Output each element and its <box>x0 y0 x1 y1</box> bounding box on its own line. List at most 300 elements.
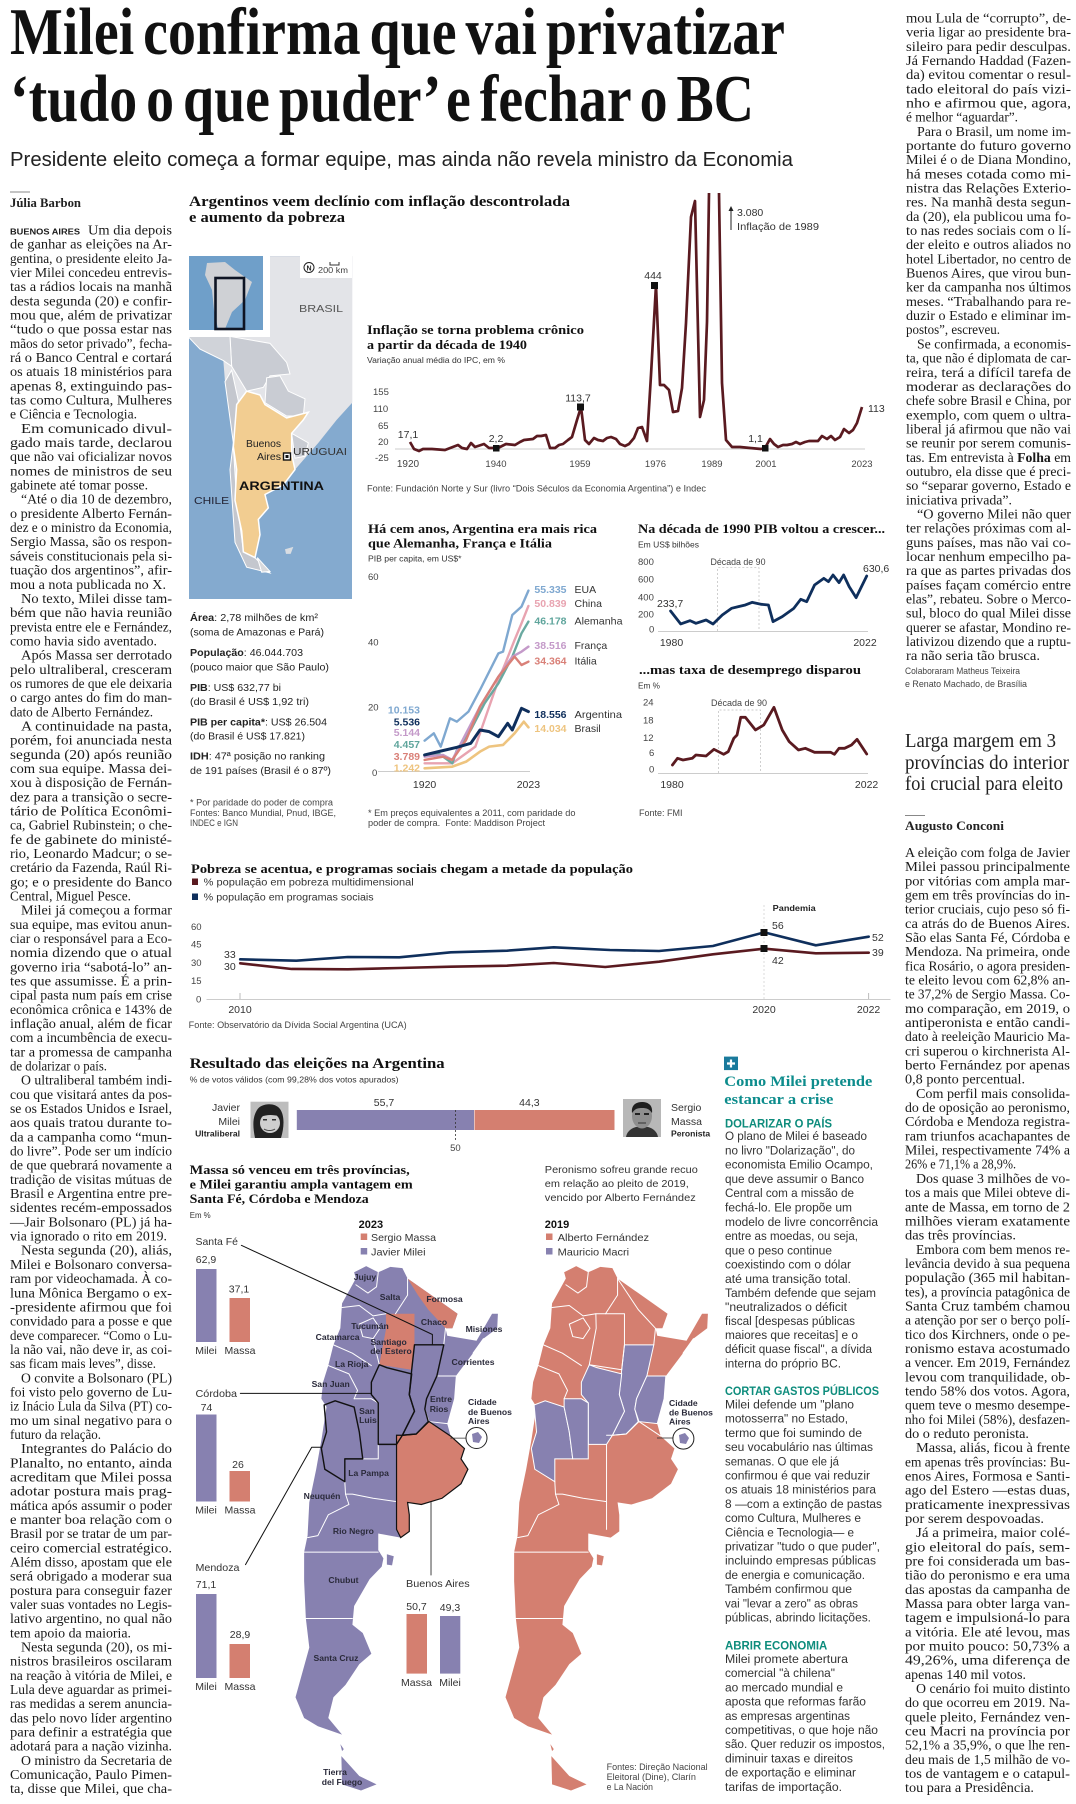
text block: main article column 1: tuação dos argentinos”, afir- <box>10 564 172 579</box>
chart: GDP per capita comparison: 1.242 <box>394 762 420 774</box>
chart: GDP per capita comparison: 18.556 <box>534 709 567 721</box>
candidate: Javier Milei: Milei <box>218 1116 240 1128</box>
panel: Como Milei pretende estancar a crise: motosserra" no Estado, <box>725 1412 848 1426</box>
text block: main article column 1: para definir a estratégia que <box>10 1726 172 1740</box>
text block: main article column 1: Nesta segunda (20), aliás, <box>21 1244 172 1259</box>
panel: Como Milei pretende estancar a crise: semanas. O que ele já <box>725 1454 839 1468</box>
text block: main article column 1: “tudo o que possa estar nas <box>10 323 172 338</box>
text block: main article continuation, right column: nistra das Relações Exterio- <box>906 182 1071 196</box>
text block: secondary article: Dos quase 3 milhões de vo- <box>916 1172 1070 1187</box>
chart: inflation line chart: 2,2 <box>489 433 503 445</box>
chart: unemployment 1980-2022: Década de 90 <box>711 698 767 709</box>
footnote: map sources: Fontes: Banco Mundial, Pnud, IBGE, <box>190 808 336 818</box>
text block: main article column 1: dato de Alberto Fernández. <box>10 705 153 720</box>
panel: Como Milei pretende estancar a crise: seu vocabulário nas últimas <box>725 1440 873 1454</box>
legend: 2019: 2019 <box>545 1219 569 1231</box>
chart: GDP per capita comparison <box>368 521 623 828</box>
text block: main article column 1: mo um sinal negativo para o <box>10 1414 172 1429</box>
text block: main article column 1: dez e o ministro da Economia, <box>10 521 172 536</box>
text block: secondary article: tos de vantagem e o catapul- <box>905 1767 1070 1782</box>
panel: Como Milei pretende estancar a crise: comercial "à chilena" <box>725 1666 835 1680</box>
credits <box>905 666 1028 690</box>
text block: main article continuation, right column: lativizou dizendo que a ruptu- <box>906 635 1071 650</box>
text block: main article continuation, right column: exemplo, com quem o ultra- <box>906 408 1071 423</box>
chart: poverty and social programs <box>189 861 890 1030</box>
text block: main article column 1: go; e o presidente do Banco <box>10 875 172 890</box>
text block: main article continuation, right column: locar nenhum empecilho pa- <box>906 550 1071 565</box>
text block: main article column 1: futuro da relação. <box>10 1428 101 1443</box>
text block: secondary article: enos Aires, Formosa e Santi- <box>905 1470 1070 1484</box>
panel: Como Milei pretende estancar a crise: ABRIR ECONOMIA <box>725 1638 828 1652</box>
chart: Mendoza bars <box>195 1562 256 1693</box>
heading: provinces <box>190 1162 413 1220</box>
chart: Buenos Aires bars: Massa <box>401 1677 432 1689</box>
text block: secondary article: ceu Macri na província por <box>905 1724 1070 1740</box>
text block: Argentina facts: (do Brasil é US$ 1,92 tri) <box>190 696 309 708</box>
text block: secondary article: tou para a Presidência. <box>905 1781 1034 1796</box>
footnote: election sources: Fontes: Direção Nacional <box>607 1762 708 1772</box>
province labels 2023: Salta <box>380 1292 400 1302</box>
text block: main article column 1: Após Massa ser derrotado <box>21 649 172 664</box>
text block: main article continuation, right column: é melhor “aguardar”. <box>906 111 1018 126</box>
panel: Como Milei pretende estancar a crise: no livro "Dolarização", do <box>725 1143 855 1157</box>
panel: Como Milei pretende estancar a crise: maiores que receitas] e o <box>725 1328 858 1342</box>
text block: main article column 1: na reação à vitória de Milei, e <box>10 1669 172 1684</box>
panel: Como Milei pretende estancar a crise: O plano de Milei é baseado <box>725 1129 867 1143</box>
panel: Como Milei pretende estancar a crise: de exportação e eliminar <box>725 1766 856 1780</box>
text block: main article continuation, right column: ker da campanha nos últimos <box>906 281 1071 296</box>
footnote: map sources <box>190 798 336 828</box>
heading: Argentinos veem declínio: Argentinos veem declínio com inflação descontrolada <box>189 194 571 210</box>
text block: main article column 1: fe de gabinete do ministé- <box>10 833 172 848</box>
province labels 2023: Misiones <box>466 1324 503 1334</box>
chart: GDP 1980-2022 <box>638 521 889 649</box>
text block: secondary article: por muito pouco: 50,73% a <box>905 1640 1071 1654</box>
chart: GDP per capita comparison: 40 <box>368 638 379 648</box>
text block: secondary article: pre foi considerada um bas- <box>905 1554 1070 1570</box>
panel: Como Milei pretende estancar a crise: como Cultura, Mulheres e <box>725 1511 861 1525</box>
credits: e Renato Machado, de Brasília <box>905 679 1028 690</box>
chart: Mendoza bars: Mendoza <box>196 1562 240 1574</box>
map: 2019 election by province: de Buenos <box>669 1408 713 1418</box>
province labels 2023: Santiago <box>370 1337 407 1347</box>
text block: main article column 1: cipal pasta num país em crise <box>10 989 172 1004</box>
province labels 2023: Rio Negro <box>333 1526 374 1536</box>
text block: main article column 1: iz Inácio Lula da Silva (PT) co- <box>10 1400 172 1415</box>
text block: secondary article: São elas Santa Fé, Córdoba e <box>905 931 1070 946</box>
text block: secondary article: Com perfil mais consolida- <box>916 1087 1070 1102</box>
chart: Córdoba bars: 26 <box>232 1459 244 1471</box>
text block: Argentina facts: População: 46.044.703 <box>190 647 303 659</box>
text block: main article column 1: nistros brasileiros oscilaram <box>10 1655 172 1670</box>
panel: Como Milei pretende estancar a crise: Milei defende um "plano <box>725 1398 854 1412</box>
chart: poverty and social programs: 30 <box>224 961 236 973</box>
text block: main article column 1: nomia dizendo que o atual <box>10 946 172 961</box>
chart: inflation line chart: 3.080 <box>737 207 763 219</box>
text block: main article column 1: Milei já começou a formar <box>21 904 172 919</box>
text block: main article column 1: acreditam que Milei possa <box>10 1470 173 1486</box>
province labels 2023: Jujuy <box>354 1272 376 1282</box>
legend: 2023 <box>359 1219 436 1258</box>
text block: main article column 1: ceiro comercial estratégico. <box>10 1541 172 1556</box>
legend: 2023: Javier Milei <box>371 1246 426 1258</box>
chart: GDP 1980-2022: Década de 90 <box>710 557 766 568</box>
text block: main article continuation, right column: Para o Brasil, um nome im- <box>917 125 1071 140</box>
text block: secondary article: te 37,2% de Sergio Massa. Co- <box>905 988 1070 1003</box>
heading: election results: % de votos válidos (com 99,28% dos votos apurados) <box>190 1074 399 1084</box>
text block: main article column 1: sua equipe, mas evitou anun- <box>10 918 172 933</box>
text block: main article column 1: Milei e Bolsonaro conversa- <box>10 1258 172 1273</box>
text block: main article column 1 <box>9 224 173 1797</box>
candidate: Javier Milei <box>195 1102 288 1138</box>
map: South America locator with Argentina: Buenos <box>246 439 281 450</box>
text block: Argentina facts: PIB per capita*: US$ 26.504 <box>190 716 327 728</box>
text block: main article column 1: o cargo antes do fim do man- <box>10 691 172 706</box>
chart: Mendoza bars: Milei <box>195 1681 217 1693</box>
credits: Colaboraram Matheus Teixeira <box>905 666 1021 677</box>
text block: secondary article: a vencer. Em 2019, Fernández <box>905 1356 1070 1371</box>
panel: Como Milei pretende estancar a crise: estancar a crise <box>724 1092 834 1108</box>
text block: main article continuation, right column: iniciativa privada”. <box>906 493 1012 508</box>
panel: Como Milei pretende estancar a crise: ao mercado mundial e <box>725 1680 843 1694</box>
text block: main article column 1: adotará para a nação vizinha. <box>10 1740 172 1755</box>
text block: main article column 1: O ministro da Secretaria de <box>21 1754 172 1769</box>
text block: main article column 1: das pelo novo líder argentino <box>10 1711 172 1726</box>
panel: Como Milei pretende estancar a crise: incluindo empresas públicas <box>725 1554 876 1568</box>
footnote: election sources <box>607 1762 708 1792</box>
text block: secondary article: apenas 140 mil votos. <box>905 1668 1026 1683</box>
text block: main article column 1: governo iria “sabotá-lo” an- <box>10 960 172 975</box>
text block: secondary article: ronismo estava acostumado <box>905 1342 1070 1357</box>
panel: Como Milei pretende estancar a crise: economista Emilio Ocampo, <box>725 1158 873 1172</box>
text block: main article column 1: ciar o responsável para a Eco- <box>10 932 172 947</box>
text block: main article column 1: cou que visitará antes da pos- <box>10 1088 172 1103</box>
panel: Como Milei pretende estancar a crise: fiscal [despesas públicas <box>725 1314 855 1328</box>
text block: main article column 1: se os Estados Unidos e Israel, <box>10 1102 172 1117</box>
heading: provinces: Santa Fé, Córdoba e Mendoza <box>190 1191 369 1206</box>
chart: GDP per capita comparison: Alemanha <box>574 616 623 628</box>
text block: main article column 1: mãos do setor privado”, fecha- <box>10 337 172 352</box>
text block: main article column 1: deve comparecer. “Como o Lu- <box>10 1329 172 1344</box>
text block: main article column 1: ras medidas a serem anuncia- <box>10 1697 172 1712</box>
panel: Como Milei pretende estancar a crise: coexistindo com o dólar <box>725 1258 851 1272</box>
panel: Como Milei pretende estancar a crise: déficit quase fiscal", a dívida <box>725 1342 872 1356</box>
text block: secondary article: tico dos Kirchners, onde o pe- <box>905 1328 1070 1343</box>
chart: inflation line chart: 1,1 <box>748 433 763 445</box>
chart: GDP 1980-2022: 200 <box>638 610 654 620</box>
chart: GDP 1980-2022: 2022 <box>853 637 877 649</box>
text block: main article column 1: mou que, além de privatizar <box>10 308 172 324</box>
chart: GDP 1980-2022: 630,6 <box>863 563 889 575</box>
text block: secondary article: quele pleito, Fernández ven- <box>905 1710 1070 1725</box>
text block: main article column 1: tas como Cultura, Mulheres <box>10 394 172 408</box>
bar: national vote result: 44,3 <box>519 1097 540 1109</box>
panel: Como Milei pretende estancar a crise: Também confirmou que <box>725 1582 852 1596</box>
map: 2019 election by province: Cidade <box>669 1398 698 1408</box>
chart: inflation line chart: 1989 <box>701 459 723 470</box>
text block: main article column 1: sáveis constitucionais pela si- <box>10 549 172 564</box>
text block: secondary article: quem teve o mesmo desempe- <box>905 1399 1070 1414</box>
text block: secondary article: levância devido à sua pequena <box>905 1257 1071 1272</box>
chart: unemployment 1980-2022 <box>638 662 878 818</box>
panel: Como Milei pretende estancar a crise: são. Quer reduzir os impostos, <box>725 1737 885 1751</box>
chart: GDP 1980-2022: 600 <box>638 574 654 586</box>
panel: Como Milei pretende estancar a crise: fechá-lo. Ele propõe um <box>725 1200 852 1214</box>
chart: GDP per capita comparison: Itália <box>574 656 597 668</box>
text block: main article continuation, right column: guns países, mas não vai co- <box>906 536 1071 551</box>
text block: main article continuation, right column: duzir o Estado e eliminar im- <box>906 309 1071 324</box>
chart: poverty and social programs: 52 <box>872 932 884 944</box>
text block: main article column 1: Planalto, no entanto, ainda <box>10 1456 173 1471</box>
text block: secondary article: 52,1% a 35,9%, o que lhe ren- <box>905 1739 1070 1754</box>
text block: secondary article: tagem e impulsioná-lo para <box>905 1611 1071 1626</box>
text block: main article continuation, right column: mou Lula de “corrupto”, de- <box>906 12 1071 26</box>
province labels 2023: Tucumán <box>351 1321 389 1331</box>
panel: Como Milei pretende estancar a crise: tarifas de importação. <box>725 1780 842 1794</box>
panel: Como Milei pretende estancar a crise: públicas, abrindo licitações. <box>725 1610 871 1624</box>
text block: main article column 1: Lula deve aguardar as primei- <box>10 1683 172 1698</box>
chart: poverty and social programs: 39 <box>872 947 884 959</box>
province labels 2023: Chaco <box>421 1317 447 1327</box>
chart: Santa Fé bars: Milei <box>195 1345 217 1357</box>
text block: main article continuation, right column: res. Na manhã desta segun- <box>906 196 1071 211</box>
chart: inflation line chart: Fonte: Fundación Norte y Sur (livro “Dois Séculos da Economia Argentina”) e Indec <box>367 484 706 494</box>
text block: main article column 1: pelo ultraliberal, cresceram <box>10 663 172 678</box>
chart: unemployment 1980-2022: 0 <box>649 764 654 776</box>
panel: Como Milei pretende estancar a crise: "neutralizados o déficit <box>725 1300 848 1314</box>
candidate: Sergio Massa: Massa <box>671 1116 702 1128</box>
chart: inflation line chart: 444 <box>644 270 662 282</box>
text block: main article column 1: Central, Miguel Pesce. <box>10 890 131 904</box>
panel: Como Milei pretende estancar a crise: modelo de livre concorrência <box>725 1215 878 1229</box>
text block: main article column 1: Integrantes do Palácio do <box>21 1442 172 1457</box>
text block: secondary article: Massa, aliás, ficou à frente <box>916 1441 1070 1456</box>
heading: secondary article <box>905 730 1069 795</box>
chart: inflation line chart: 110 <box>373 404 388 415</box>
text block: secondary article: ca atrás do de Buenos Aires. <box>905 917 1070 932</box>
text block: secondary article: das apostas da campanha de <box>905 1583 1070 1598</box>
text block: main article continuation, right column: nho e afirmou que, agora, <box>906 96 1071 112</box>
text block: main article column 1: tário de Política Econômi- <box>10 804 172 820</box>
text block: main article column 1: o presidente Alberto Fernán- <box>10 507 172 522</box>
text block: main article column 1: convidado para a posse e que <box>10 1315 172 1330</box>
text block: main article column 1: prevista entre ele e Fernández, <box>10 620 172 635</box>
text block: secondary article: milhões vieram exatamente <box>905 1214 1070 1229</box>
province labels 2023: San <box>359 1406 375 1416</box>
text block: secondary article: gio eleitoral do país, sem- <box>905 1540 1070 1555</box>
map: South America locator with Argentina: Aires <box>257 452 281 463</box>
panel: Como Milei pretende estancar a crise: confirmou é que vai reduzir <box>725 1468 870 1482</box>
chart: Córdoba bars: Milei <box>195 1504 217 1516</box>
text block: secondary article: deu mais de 1,5 milhão de vo- <box>905 1753 1070 1768</box>
text block: main article continuation, right column: “O governo Milei não quer <box>917 508 1071 522</box>
text block: secondary article: te eleito levou com 62,8% an- <box>905 974 1070 988</box>
text block: main article column 1: A continuidade na pasta, <box>21 720 172 734</box>
text block: secondary article: Já a primeira, maior colé- <box>916 1526 1070 1541</box>
text block: main article continuation, right column: elas”, rebateu. Sobre o Merco- <box>906 592 1071 608</box>
text block: main article column 1: —Jair Bolsonaro (PL) já ha- <box>9 1215 172 1230</box>
chart: GDP per capita comparison: que Alemanha, França e Itália <box>368 536 553 550</box>
candidate: Sergio Massa <box>623 1099 710 1138</box>
chart: Mendoza bars: 28,9 <box>230 1629 250 1641</box>
text block: main article column 1: la não vai, não deve ir, as coi- <box>10 1343 172 1358</box>
text block: main article continuation, right column: Se confirmada, a economis- <box>917 337 1071 352</box>
chart: inflation line chart: 1959 <box>569 459 591 470</box>
text block: main article continuation, right column: Milei é o de Diana Mondino, <box>906 153 1071 168</box>
text block: Peronism note <box>545 1164 698 1204</box>
text block: main article continuation, right column: portante do futuro governo <box>906 139 1071 154</box>
chart: poverty and social programs: 33 <box>224 949 236 961</box>
text block: main article column 1: vier Milei concedeu entrevis- <box>10 266 172 281</box>
province labels 2023: Tierra <box>323 1767 347 1777</box>
province labels 2023: Rios <box>430 1404 449 1414</box>
text block: main article continuation, right column: ter relações próximas com al- <box>906 522 1071 537</box>
map: South America locator with Argentina: ARGENTINA <box>239 479 324 493</box>
text block: main article column 1: ta, disse que Milei, que cha- <box>10 1782 172 1797</box>
legend: 2023: 2023 <box>359 1219 383 1231</box>
province labels 2023: Formosa <box>426 1294 463 1304</box>
chart: inflation line chart: 2001 <box>755 459 777 470</box>
text block: main article column 1: aos quais tratou durante to- <box>10 1116 172 1131</box>
heading: secondary article: Larga margem em 3 <box>905 730 1056 752</box>
panel: Como Milei pretende estancar a crise: os atuais 18 ministérios para <box>725 1483 876 1497</box>
text block: Argentina facts: (soma de Amazonas e Pará) <box>190 626 324 638</box>
chart: poverty and social programs: Fonte: Observatório da Dívida Social Argentina (UCA) <box>189 1020 407 1030</box>
text block: secondary article: do o reduto peronista. <box>905 1427 1029 1442</box>
map: South America locator with Argentina: URUGUAI <box>293 446 347 458</box>
heading: election results <box>190 1056 445 1084</box>
text block: main article column 1: tas a rádios locais na manhã <box>10 280 173 295</box>
chart: GDP per capita comparison: Há cem anos, Argentina era mais rica <box>368 521 598 536</box>
footnote: map sources: INDEC e IGN <box>190 818 238 828</box>
chart: GDP 1980-2022: 233,7 <box>657 598 683 610</box>
text block: secondary article: Córdoba e Mendoza registra- <box>905 1115 1070 1130</box>
heading: provinces: Em % <box>190 1210 211 1220</box>
text block: main article continuation, right column: moderar as declarações do <box>906 380 1071 395</box>
province labels 2023: Luis <box>359 1415 377 1425</box>
chart: Córdoba bars: Córdoba <box>196 1388 237 1400</box>
text block: main article continuation, right column <box>906 12 1071 664</box>
text block: secondary article: 0,8 ponto percentual. <box>905 1073 1025 1088</box>
text block: main article column 1: econômica crônica e 143% de <box>10 1003 172 1018</box>
chart: GDP 1980-2022: 800 <box>638 557 654 568</box>
chart: GDP per capita comparison: 60 <box>368 572 379 583</box>
panel: Como Milei pretende estancar a crise: que o peso continue <box>725 1243 832 1257</box>
text block: main article continuation, right column: querer se afastar, Mondino re- <box>906 621 1071 636</box>
text block: main article column 1: e manter boa relação com o <box>10 1513 172 1528</box>
text block: main article column 1: de que quebrará novamente a <box>10 1159 173 1174</box>
chart: GDP 1980-2022: 1980 <box>660 637 683 649</box>
text block: main article column 1: com sua equipe. Massa dei- <box>10 762 172 777</box>
text block: main article column 1: via ignorado o rito em 2019. <box>10 1230 167 1245</box>
chart: unemployment 1980-2022: 12 <box>643 733 654 744</box>
text block: secondary article: gem em três províncias do in- <box>905 888 1070 904</box>
text block: main article column 1: luna Mônica Bergamo o ex- <box>10 1286 172 1301</box>
chart: Santa Fé bars: 37,1 <box>229 1284 249 1296</box>
legend: 2023: Sergio Massa <box>371 1232 436 1244</box>
text block: main article column 1: que não vai oficializar novos <box>10 450 172 465</box>
panel: Como Milei pretende estancar a crise: entre as moedas, ou seja, <box>725 1229 858 1243</box>
text block: main article column 1: foi visto pelo governo de Lu- <box>10 1385 172 1400</box>
text block: secondary article: mo comparação, em 2019, o <box>905 1002 1070 1017</box>
province labels 2023: Chubut <box>328 1575 359 1585</box>
panel: Como Milei pretende estancar a crise: 8 —com a extinção de pastas <box>725 1497 882 1511</box>
chart: inflation line chart: 1940 <box>485 459 507 470</box>
text block: Argentina facts <box>190 611 331 777</box>
chart: GDP 1980-2022: Em US$ bilhões <box>638 540 699 550</box>
byline: Júlia Barbon: Júlia Barbon <box>10 196 81 210</box>
text block: secondary article: fica Rosário, o agora presiden- <box>905 959 1070 974</box>
chart: GDP per capita comparison: Brasil <box>574 723 601 735</box>
heading: Argentinos veem declínio <box>189 194 571 226</box>
text block: main article column 1: mática após assumir o poder <box>10 1499 172 1514</box>
panel: Como Milei pretende estancar a crise: as empresas argentinas <box>725 1709 850 1723</box>
text block: main article continuation, right column: ra que as partes privadas dos <box>906 564 1071 579</box>
chart: inflation line chart: 155 <box>373 387 389 398</box>
text block: main article column 1: “Até o dia 10 de dezembro, <box>21 493 172 508</box>
text block: main article column 1: ram por videochamada. À co- <box>10 1270 172 1287</box>
text block: secondary article: ram triunfos acachapantes de <box>905 1129 1070 1144</box>
bar: national vote result: 50 <box>450 1143 461 1154</box>
text block: secondary article: berto Fernández por apenas <box>905 1059 1070 1074</box>
icon: Milei portrait <box>250 1102 288 1138</box>
chart: GDP per capita comparison: PIB per capita, em US$* <box>368 554 462 564</box>
chart: GDP per capita comparison: 5.144 <box>394 727 420 739</box>
text block: main article column 1: Sergio Massa, são os respon- <box>10 535 172 550</box>
text block: main article column 1: desta segunda (20) e confir- <box>10 294 172 309</box>
text block: main article continuation, right column: ra não seria tão brusca. <box>906 649 1040 664</box>
panel: Como Milei pretende estancar a crise: Também defende que sejam <box>725 1286 876 1300</box>
panel: Como Milei pretende estancar a crise: Central com a missão de <box>725 1186 854 1200</box>
chart: unemployment 1980-2022: ...mas taxa de desemprego disparou <box>639 662 861 677</box>
chart: Buenos Aires bars: 50,7 <box>406 1601 427 1613</box>
chart: inflation line chart: a partir da década de 1940 <box>367 337 527 352</box>
text block: main article column 1: Um dia depois <box>88 224 172 238</box>
chart: inflation line chart: 20 <box>378 437 389 448</box>
chart: poverty and social programs: 45 <box>191 940 202 950</box>
chart: GDP per capita comparison: 10.153 <box>388 704 420 716</box>
icon: Massa portrait <box>623 1099 661 1137</box>
text block: main article column 1: porém, foi anunciada nesta <box>10 734 173 749</box>
chart: GDP per capita comparison: 0 <box>372 768 377 779</box>
chart: GDP per capita comparison: China <box>574 598 602 610</box>
text block: secondary article: ante de Massa, em torno de 2 <box>905 1200 1070 1215</box>
text block: secondary article: tião do peronismo e era uma <box>905 1569 1071 1584</box>
heading: Argentinos veem declínio: e aumento da pobreza <box>189 210 346 226</box>
text block: secondary article: dato à reeleição Mauricio Ma- <box>905 1030 1070 1045</box>
text block: Argentina facts: (do Brasil é US$ 17.821) <box>190 731 305 743</box>
chart: GDP per capita comparison: poder de compra. Fonte: Maddison Project <box>368 818 546 828</box>
text block: main article column 1: sas ficam mais leves”, disse. <box>10 1357 156 1372</box>
text block: secondary article: população (365 mil habitan- <box>905 1271 1070 1286</box>
chart: inflation line chart: 17,1 <box>398 429 418 441</box>
text block: main article column 1: os rumores de que ele deixaria <box>10 677 173 692</box>
chart: poverty and social programs: 30 <box>191 958 202 969</box>
text block: main article column 1: Comunicação, Paulo Pimen- <box>10 1768 172 1783</box>
text block: Argentina facts: (pouco maior que São Paulo) <box>190 662 329 674</box>
province labels 2023: La Rioja <box>335 1359 369 1369</box>
legend: 2019 <box>545 1219 649 1258</box>
chart: Santa Fé bars <box>195 1236 256 1357</box>
chart: GDP per capita comparison: 46.178 <box>534 616 567 628</box>
text block: main article column 1: dez para a transição o secre- <box>10 790 172 805</box>
text block: main article continuation, right column: da (20), ela publicou uma fo- <box>906 210 1071 225</box>
text block: secondary article: a atenção por ser o berço polí- <box>905 1314 1070 1329</box>
text block: secondary article: praticamente inexpressivas <box>905 1498 1070 1513</box>
province labels 2023: Santa Cruz <box>314 1653 358 1663</box>
text block: secondary article: 49,26%, uma diferença de <box>905 1654 1070 1669</box>
text block: secondary article: do que ocorreu em 2019. Na- <box>905 1696 1070 1711</box>
